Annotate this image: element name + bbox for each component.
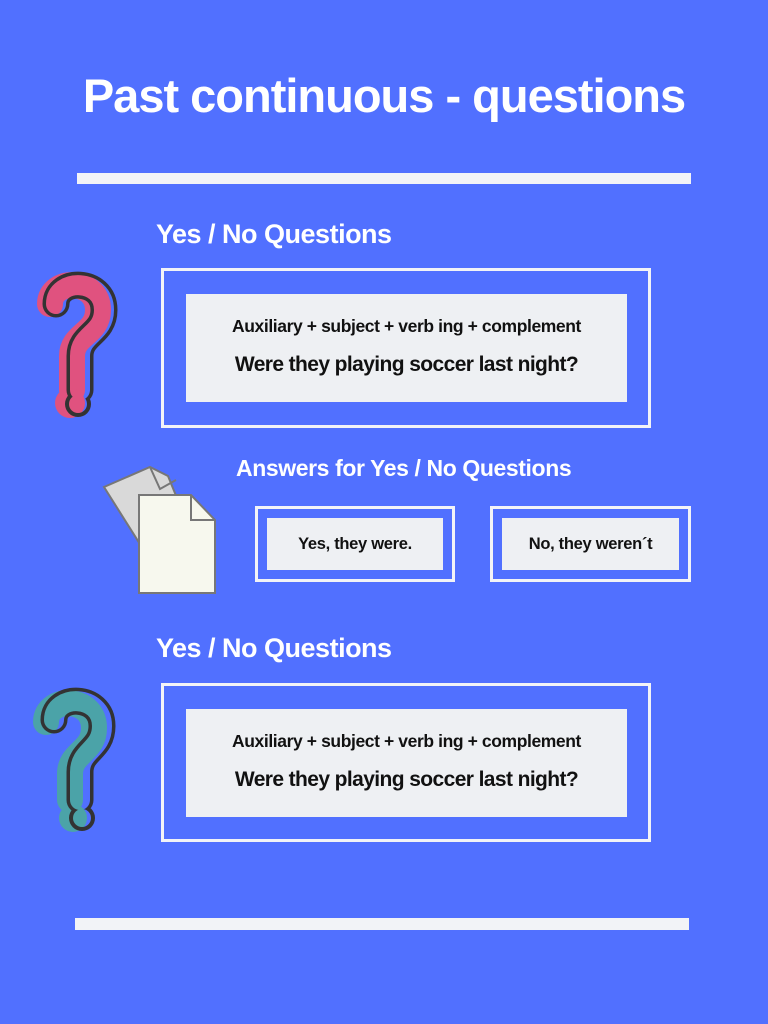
answer: yes	[255, 506, 455, 582]
panel: yes/no question formula 2	[161, 683, 651, 842]
answer: yes: Yes, they were.	[298, 535, 412, 553]
title: Past continuous - questions	[83, 69, 685, 122]
formula box: Were they playing soccer last night?	[235, 353, 578, 376]
heading: yes/no questions 2: Yes / No Questions	[156, 633, 392, 663]
heading: yes/no questions 1: Yes / No Questions	[156, 219, 392, 249]
icon: pink question mark	[37, 272, 118, 418]
formula box: Were they playing soccer last night?	[235, 768, 578, 791]
answer: no: No, they weren´t	[529, 535, 652, 553]
icon: teal question mark	[33, 688, 116, 832]
heading: answers: Answers for Yes / No Questions	[236, 455, 571, 481]
formula box	[186, 709, 627, 817]
answer: no	[490, 506, 691, 582]
formula box: Auxiliary + subject + verb ing + complement	[232, 731, 581, 751]
icon: documents	[102, 466, 216, 594]
formula box	[186, 294, 627, 402]
panel: yes/no question formula 1	[161, 268, 651, 428]
formula box: Auxiliary + subject + verb ing + complement	[232, 316, 581, 336]
